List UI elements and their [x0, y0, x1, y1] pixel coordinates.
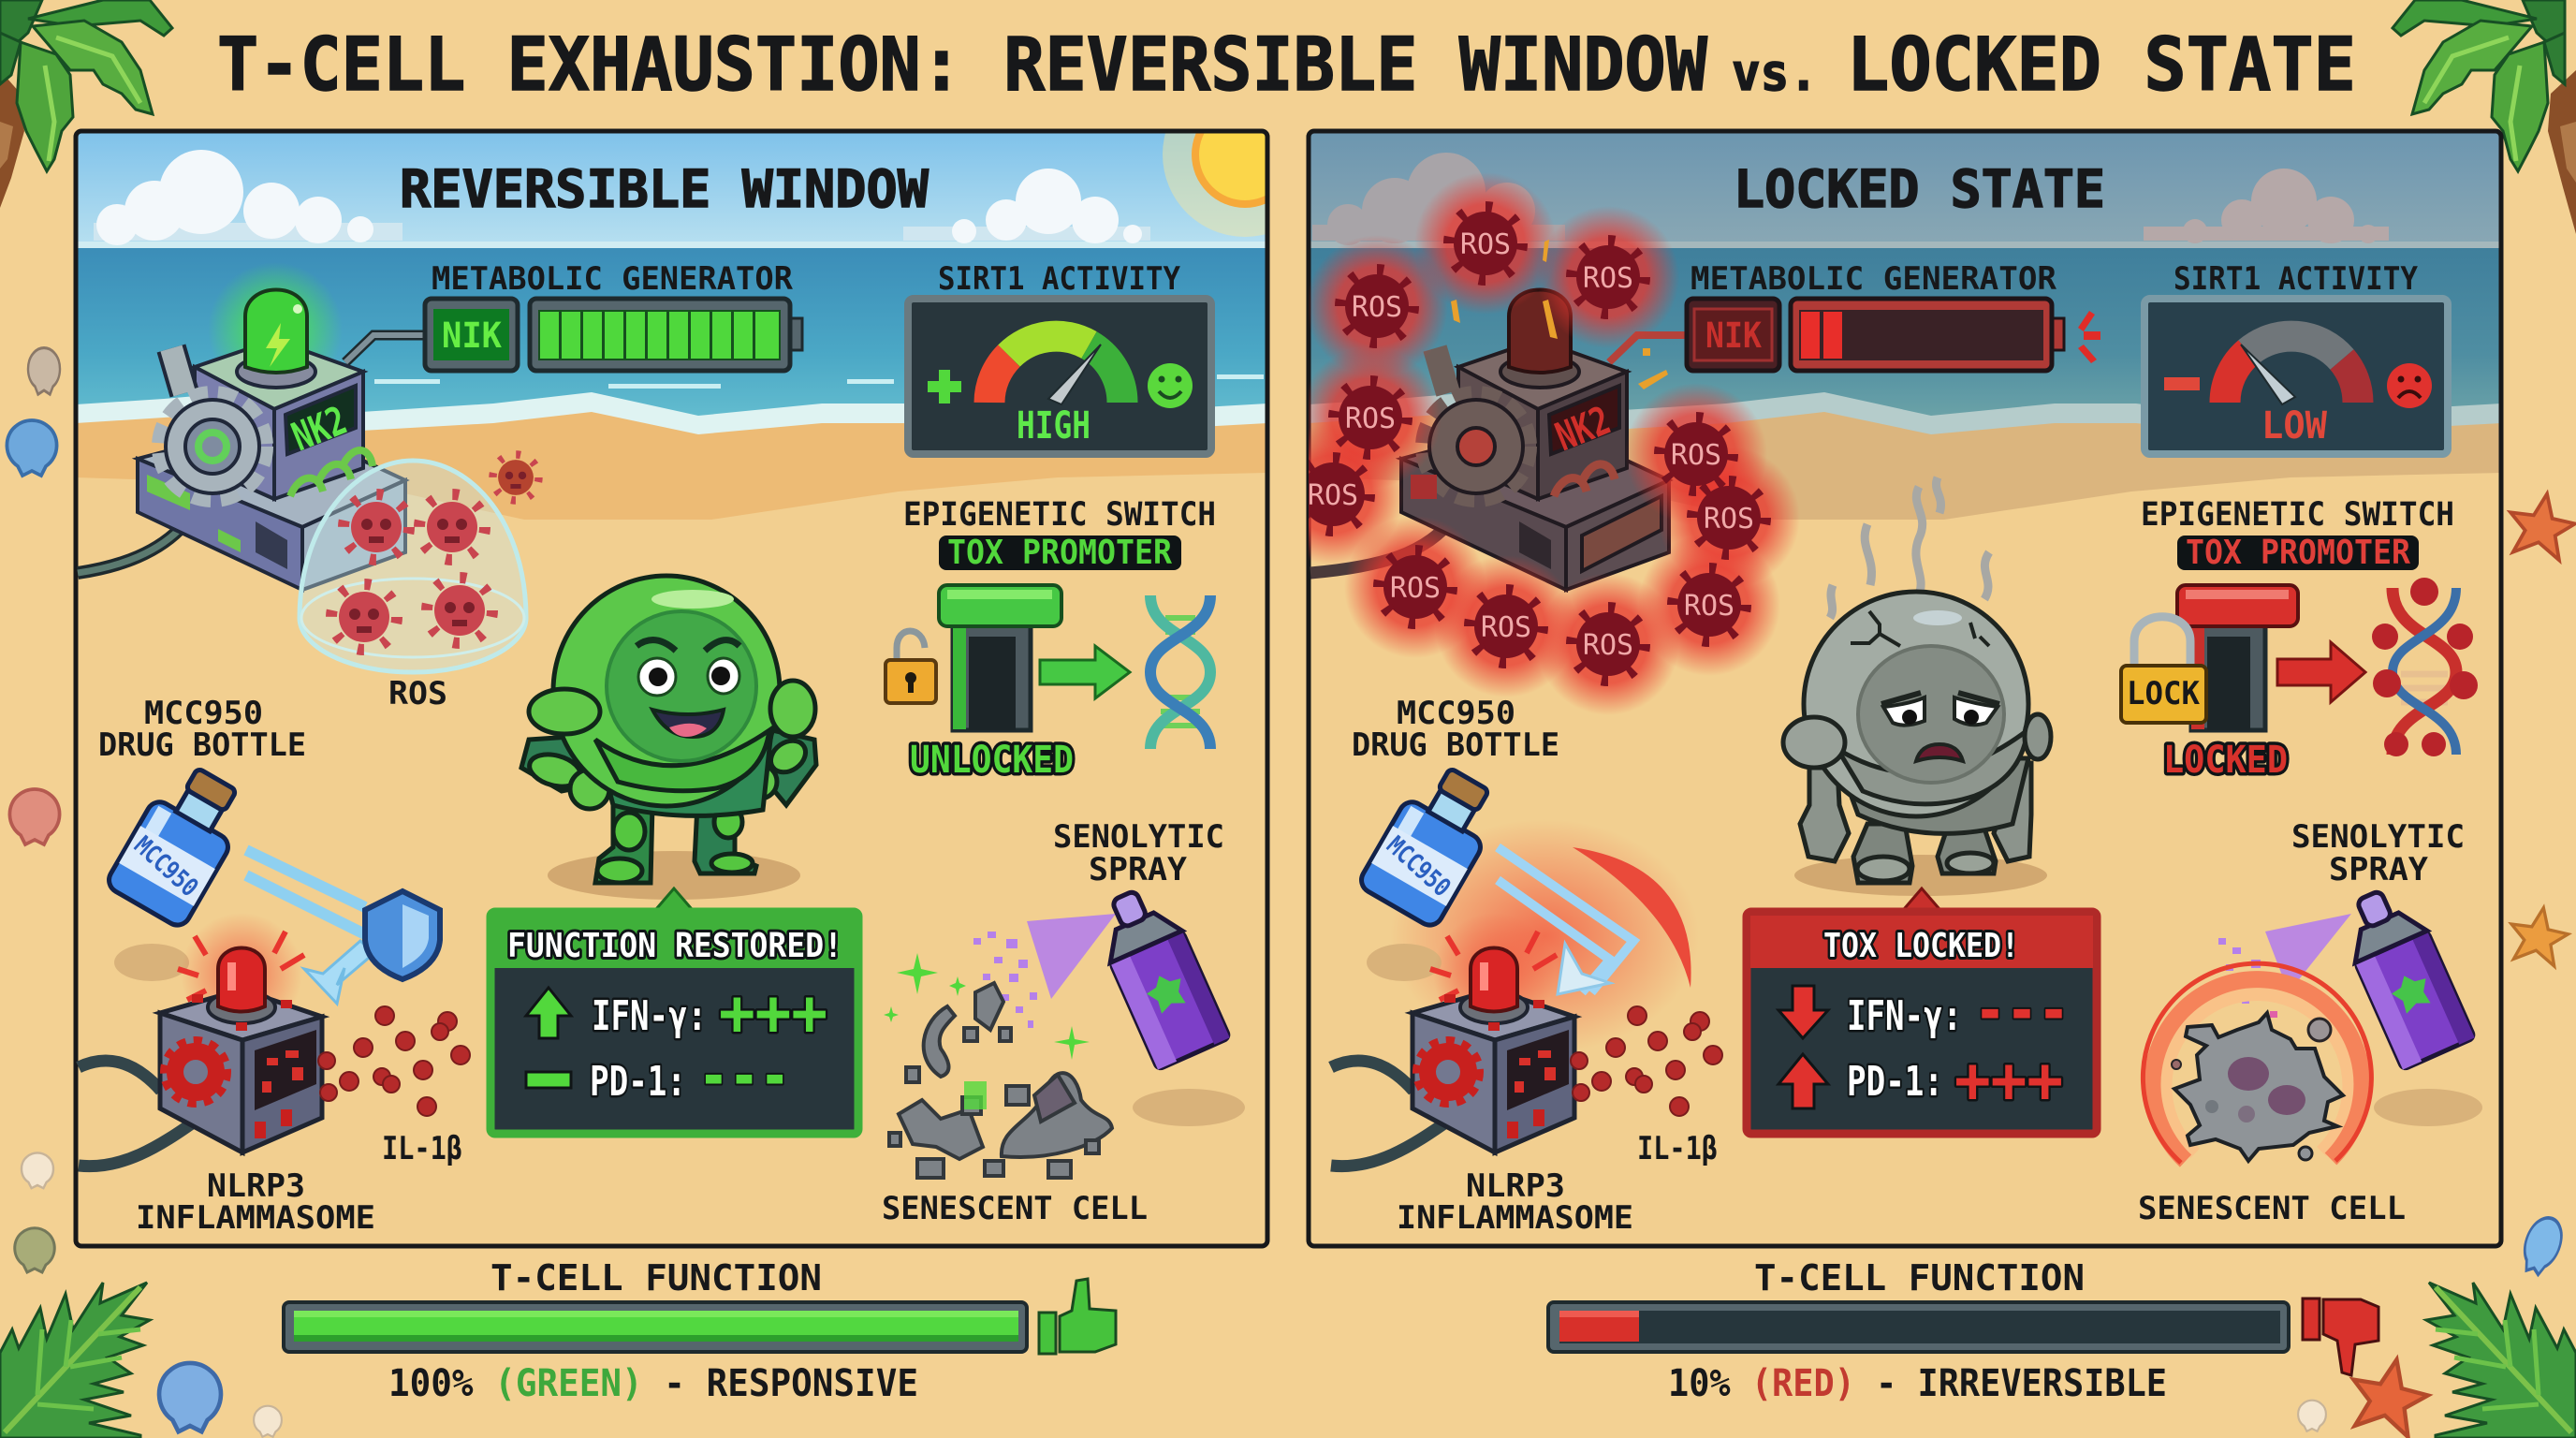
callout: TOX locked: TOX LOCKED! — [1823, 927, 2019, 965]
steam — [1830, 477, 1989, 618]
SIRT1 label: SIRT1 ACTIVITY — [938, 260, 1180, 298]
decoration: top-left palm — [0, 0, 172, 208]
panel heading: REVERSIBLE WINDOW — [400, 159, 929, 219]
callout: TOX locked: --- — [1974, 974, 2070, 1048]
red low battery — [1791, 299, 2064, 371]
callout: function restored: +++ — [719, 976, 827, 1050]
icon: thumbs down — [2303, 1299, 2378, 1375]
sand stain — [1367, 944, 1442, 981]
unlocked label: UNLOCKED — [910, 739, 1074, 782]
gauge caption: 10% (RED) - IRREVERSIBLE — [1668, 1362, 2167, 1405]
exhausted stone T-cell — [1783, 592, 2051, 896]
decoration: top-right palm — [2393, 0, 2576, 234]
IL-1 beta particles — [318, 1006, 470, 1116]
senolytic spray label — [1053, 818, 1224, 888]
NLRP3 inflammasome — [79, 913, 322, 1167]
NLRP3 label: NLRP3 — [207, 1167, 305, 1205]
SIRT1 gauge low — [2144, 299, 2448, 454]
ROS swarm — [1262, 172, 1800, 715]
SIRT1 gauge low: LOW — [2261, 404, 2328, 448]
MCC950 label — [98, 695, 306, 764]
sparks near machine — [1451, 240, 1668, 389]
callout: function restored — [490, 888, 858, 1134]
panel: reversible window — [76, 72, 1327, 1246]
sand stain under can — [1133, 1089, 1245, 1126]
senescent cell label: SENESCENT CELL — [2138, 1190, 2406, 1227]
spray can — [2333, 879, 2475, 1070]
red progress bar — [1548, 1302, 2289, 1352]
panel heading: LOCKED STATE — [1734, 159, 2105, 219]
callout: function restored: FUNCTION RESTORED! — [507, 927, 842, 965]
senolytic spray can — [1088, 879, 1230, 1070]
ROS shield dome — [300, 455, 539, 672]
blue inhibition beam — [246, 850, 374, 1004]
callout: function restored: PD-1: — [590, 1058, 686, 1106]
beach scene background — [79, 133, 1266, 520]
dead metabolic machine — [1310, 290, 1687, 590]
IL-1 beta label: IL-1β — [1637, 1130, 1718, 1167]
MCC950 label: DRUG BOTTLE — [1352, 726, 1559, 764]
gauge caption: 100% (GREEN) - RESPONSIVE — [388, 1362, 918, 1405]
panel frame — [1309, 131, 2501, 1246]
green battery — [530, 299, 802, 371]
NLRP3 label — [1397, 1167, 1633, 1237]
DNA helix — [1150, 595, 1210, 749]
senolytic spray label: SPRAY — [1089, 851, 1188, 888]
ROS label: ROS — [388, 675, 447, 712]
decoration: bottom-right palm leaf — [2426, 1283, 2576, 1438]
SIRT1 label: SIRT1 ACTIVITY — [2174, 260, 2418, 298]
ROS swarm: ROS — [1583, 629, 1633, 662]
NIK box dead — [1687, 299, 1779, 371]
ROS swarm: ROS — [1352, 291, 1402, 324]
senolytic spray label: SPRAY — [2329, 851, 2429, 888]
NLRP3 label: INFLAMMASOME — [1397, 1199, 1633, 1237]
open padlock — [886, 631, 936, 703]
ROS swarm: ROS — [1704, 503, 1754, 536]
metabolic generator label: METABOLIC GENERATOR — [432, 260, 794, 298]
green progress bar — [284, 1302, 1027, 1352]
MCC950 label: MCC950 — [144, 695, 263, 732]
green arrow — [1040, 646, 1130, 698]
ROS swarm: ROS — [1684, 590, 1734, 623]
red arrow — [2277, 642, 2365, 702]
title: T-CELL EXHAUSTION: REVERSIBLE WINDOW — [217, 23, 1707, 108]
epigenetic switch label: EPIGENETIC SWITCH — [903, 496, 1216, 534]
senolytic spray label — [2291, 818, 2465, 888]
ROS swarm: ROS — [1671, 439, 1721, 472]
panel: locked state — [1262, 131, 2501, 1246]
battery warning sparks — [2078, 311, 2100, 363]
icon: thumbs up — [1039, 1279, 1116, 1354]
senolytic spray label: SENOLYTIC — [2291, 818, 2465, 856]
spray plume — [973, 914, 1116, 1028]
TOX promoter pill: TOX PROMOTER — [2186, 534, 2410, 572]
metabolic generator machine — [78, 262, 423, 590]
spray plume — [2218, 914, 2351, 1018]
decoration: shells and starfish — [7, 348, 2576, 1438]
callout: TOX locked: IFN-γ: — [1847, 992, 1962, 1040]
callout: function restored: IFN-γ: — [592, 992, 707, 1040]
callout: TOX locked: PD-1: — [1847, 1058, 1943, 1106]
deflected beam — [1498, 847, 1633, 994]
closed padlock: LOCK — [2127, 675, 2200, 712]
senolytic spray label: SENOLYTIC — [1053, 818, 1224, 856]
panel frame — [76, 131, 1267, 1246]
senescent cell label: SENESCENT CELL — [882, 1190, 1148, 1227]
shield — [365, 891, 440, 979]
gauge heading: T-CELL FUNCTION — [490, 1257, 822, 1299]
epigenetic switch label: EPIGENETIC SWITCH — [2141, 496, 2454, 534]
gauge heading: T-CELL FUNCTION — [1754, 1257, 2085, 1299]
sand stain under can — [2374, 1089, 2482, 1126]
NLRP3 inflammasome — [1331, 913, 1574, 1167]
ROS swarm: ROS — [1460, 228, 1511, 261]
NLRP3 label: INFLAMMASOME — [136, 1199, 375, 1237]
MCC950 label — [1352, 695, 1559, 764]
NLRP3 label: NLRP3 — [1466, 1167, 1565, 1205]
T-cell function gauge: irreversible — [1548, 1257, 2378, 1405]
metabolic generator machine: NK2 — [285, 397, 353, 460]
dead metabolic machine: NK2 — [1549, 397, 1617, 460]
NIK box: NIK — [442, 315, 503, 356]
T-cell function gauge: responsive — [284, 1257, 1116, 1405]
ROS swarm: ROS — [1583, 262, 1633, 295]
MCC950 bottle — [1356, 756, 1509, 930]
closed padlock — [2121, 617, 2206, 723]
locked switch — [2177, 585, 2298, 730]
IL-1 beta particles — [1571, 1006, 1722, 1116]
ROS swarm: ROS — [1481, 611, 1531, 644]
NIK box — [425, 299, 518, 371]
dim beach scene background — [1310, 133, 2499, 520]
ROS swarm: ROS — [1390, 572, 1441, 605]
title: vs. — [1732, 43, 1818, 102]
callout: TOX locked — [1747, 888, 2097, 1134]
red resistance halo — [1390, 819, 1699, 1053]
green sparkles — [884, 953, 1090, 1109]
metabolic generator label: METABOLIC GENERATOR — [1690, 260, 2057, 298]
SIRT1 gauge high — [908, 299, 1211, 454]
TOX promoter pill: TOX PROMOTER — [947, 534, 1172, 572]
ROS swarm: ROS — [1308, 479, 1358, 512]
destroyed senescent cell debris — [889, 983, 1112, 1178]
ROS swarm: ROS — [1345, 403, 1396, 435]
locked label: LOCKED — [2163, 739, 2288, 782]
SIRT1 gauge high: HIGH — [1017, 404, 1090, 448]
IL-1 beta label: IL-1β — [382, 1130, 462, 1167]
resistant senescent cell — [2143, 963, 2371, 1163]
callout: TOX locked: +++ — [1954, 1044, 2063, 1118]
title: LOCKED STATE — [1847, 23, 2356, 108]
NLRP3 label — [136, 1167, 375, 1237]
T-cell hero character — [521, 576, 816, 900]
sand stain — [114, 944, 189, 981]
MCC950 drug bottle — [104, 756, 256, 930]
MCC950 label: MCC950 — [1397, 695, 1515, 732]
MCC950 label: DRUG BOTTLE — [98, 726, 306, 764]
NIK box dead: NIK — [1705, 315, 1763, 356]
unlocked switch — [939, 585, 1061, 730]
damaged DNA helix — [2372, 578, 2478, 756]
callout: function restored: --- — [698, 1039, 790, 1113]
decoration: bottom-left palm leaf — [0, 1283, 150, 1438]
